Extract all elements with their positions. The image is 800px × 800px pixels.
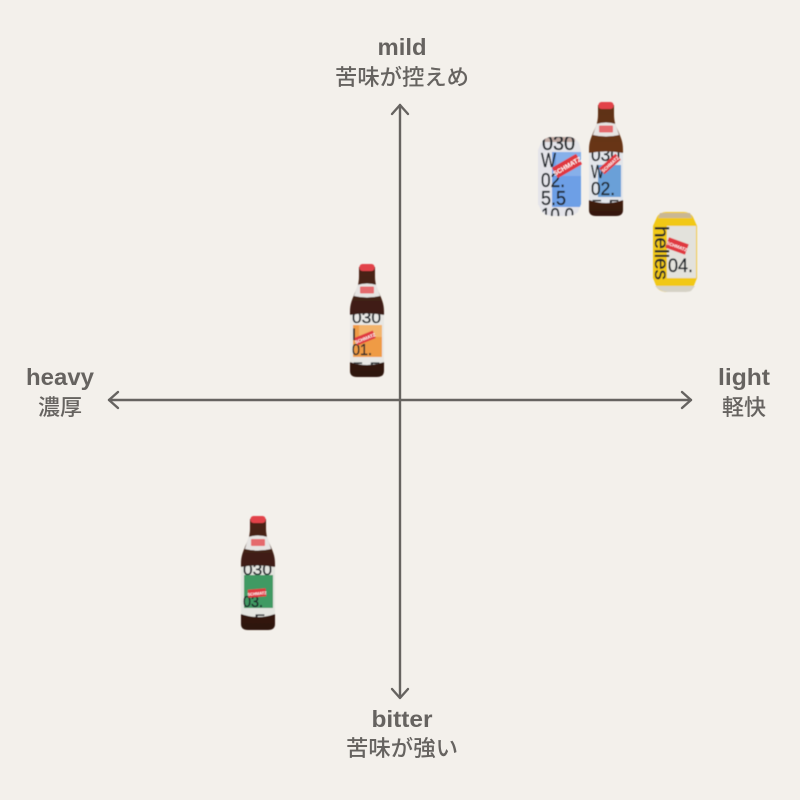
can: W 02 blue: 10.0 [541, 205, 574, 227]
horizontal axis arrow [109, 392, 691, 408]
can: W 02 blue: W [541, 150, 556, 172]
bottle: 03 green: 030 [243, 562, 272, 579]
label: bitter [346, 706, 458, 761]
label: light: 軽快 [722, 395, 766, 420]
bottle: 03 green: 03. [243, 594, 263, 611]
can: helles 04 yellow [650, 212, 697, 292]
bottle: L 01 orange: 030 [352, 310, 381, 327]
label: mild: mild [378, 34, 426, 60]
can: W 02 blue [538, 136, 582, 217]
can: W 02 blue: 5.5 [541, 188, 566, 210]
label: heavy [26, 364, 94, 420]
label: light [718, 364, 770, 420]
bottle: W 02 blue: 02. [591, 179, 615, 199]
bottle: W 02 blue: 5 5 [591, 197, 620, 217]
can: W 02 blue: 030 [542, 133, 575, 155]
can: W 02 blue: 02. [541, 170, 565, 192]
label: heavy: 濃厚 [38, 395, 82, 420]
can: helles 04 yellow: 04. [668, 256, 693, 277]
bottle: 03 green: SCHMATZ [247, 590, 267, 597]
bottle: W 02 blue: 030 [591, 145, 620, 165]
label: light: light [718, 364, 770, 390]
bottle: L 01 orange [350, 264, 384, 378]
label: bitter: 苦味が強い [346, 736, 458, 761]
can: helles 04 yellow: SCHMATZ [666, 240, 688, 253]
bottle: L 01 orange: 01. [352, 342, 372, 359]
can: W 02 blue: SCHMATZ [552, 156, 583, 178]
bottle: W 02 blue [589, 102, 623, 217]
label: heavy: heavy [26, 364, 94, 390]
bottle: L 01 orange: L [352, 325, 361, 344]
bottle: L 01 orange: 5 5 [352, 359, 381, 378]
label: mild: 苦味が控えめ [335, 65, 469, 90]
vertical axis arrow [392, 105, 408, 698]
bottle: 03 green [241, 516, 275, 630]
label: bitter: bitter [372, 706, 433, 732]
bottle: L 01 orange: SCHMATZ [354, 332, 376, 345]
bottle: W 02 blue: SCHMATZ [601, 155, 620, 173]
can: helles 04 yellow: helles [650, 226, 671, 280]
label: mild [335, 34, 469, 90]
bottle: 03 green: 5 [254, 611, 266, 630]
bottle: W 02 blue: W [591, 162, 604, 182]
